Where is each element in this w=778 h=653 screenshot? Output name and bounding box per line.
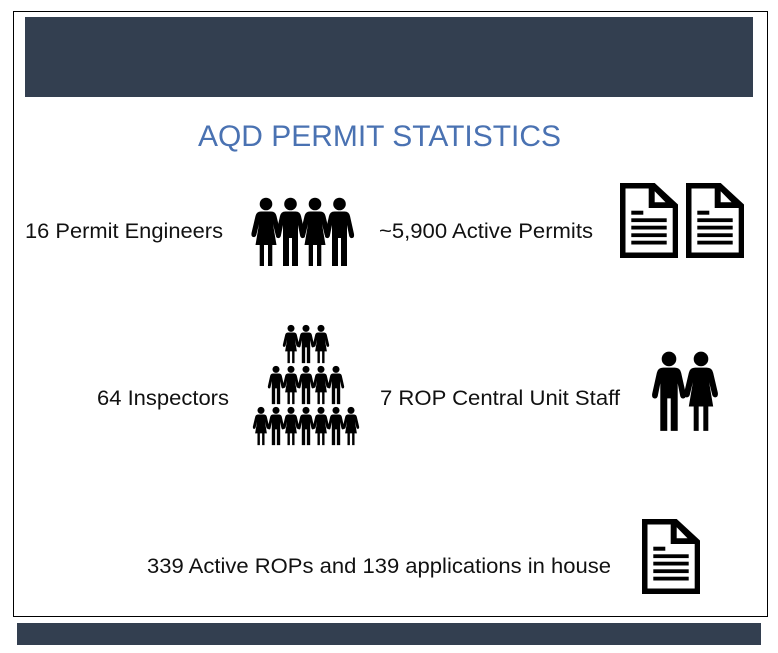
label: ROP central unit staff: 7 ROP Central Unit Staff: [380, 387, 620, 410]
icon: four people: [251, 198, 354, 266]
top banner: [25, 17, 753, 97]
icon: two documents: [620, 183, 744, 258]
icon: single document: [642, 519, 700, 594]
label: active ROPs and applications: 339 Active ROPs and 139 applications in house: [147, 555, 611, 578]
label: active permits: ~5,900 Active Permits: [379, 220, 593, 243]
title: AQD PERMIT STATISTICS: [198, 120, 561, 153]
icon: two people: [652, 352, 718, 431]
label: inspectors: 64 Inspectors: [97, 387, 229, 410]
footer bar: [17, 623, 761, 645]
label: permit engineers: 16 Permit Engineers: [25, 220, 223, 243]
icon: pyramid of people: [253, 325, 359, 445]
